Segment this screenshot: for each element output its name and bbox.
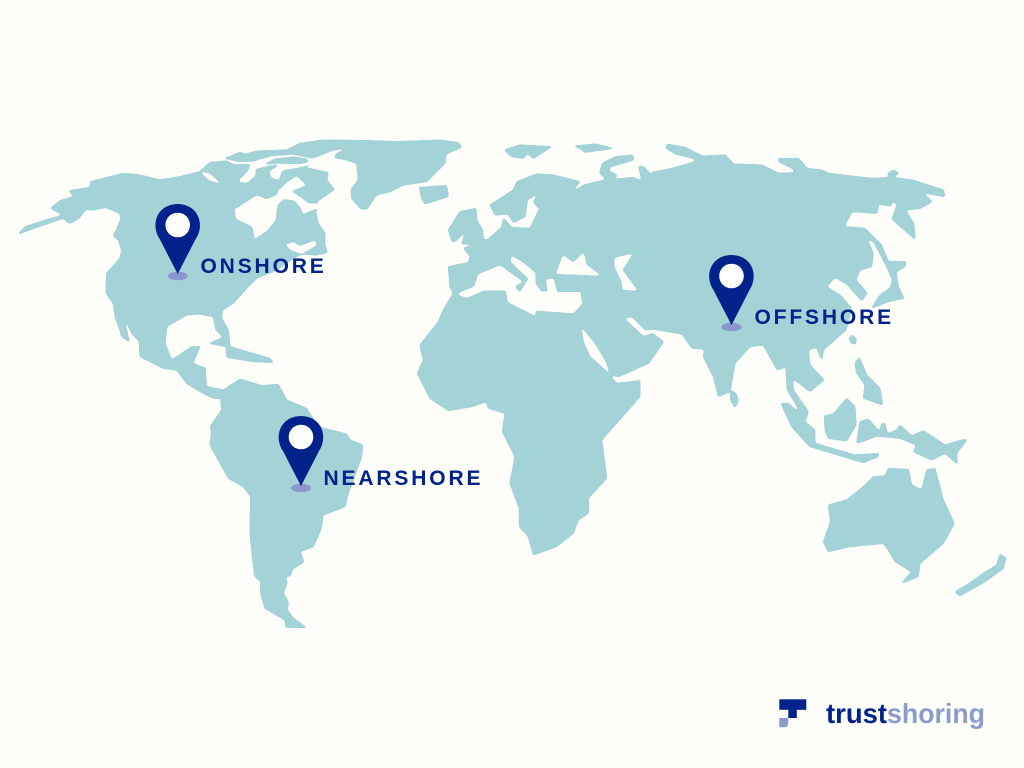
pin: nearshore — [279, 416, 323, 492]
landmass: Greenland and Arctic strip — [225, 140, 462, 209]
landmass: Eurasia and Africa — [417, 144, 945, 555]
world map — [18, 140, 1006, 627]
logo wordmark: trustshoring — [826, 698, 985, 729]
pin: onshore — [155, 204, 200, 280]
seas: Hudson Bay and Arctic channels — [202, 156, 320, 253]
Sri Lanka — [730, 390, 738, 408]
landmass: Americas — [18, 160, 363, 627]
logo: trustshoring — [779, 698, 985, 729]
label: onshore: ONSHORE — [200, 255, 327, 278]
islands: Taiwan — [849, 335, 857, 344]
pin: offshore — [709, 255, 754, 331]
islands: Svalbard and Novaya Zemlya — [504, 144, 613, 158]
landmass: Arctic island and Iceland — [265, 157, 448, 204]
Philippines — [855, 357, 883, 405]
islands and Australia — [730, 357, 1006, 596]
Borneo — [824, 398, 856, 441]
Australia — [823, 468, 954, 583]
seas: Mediterranean, Black Sea and Caspian — [458, 253, 637, 315]
New Zealand — [955, 554, 1006, 596]
New Guinea chain — [857, 419, 967, 464]
label: offshore: OFFSHORE — [754, 306, 894, 329]
logo icon — [779, 699, 806, 727]
label: nearshore: NEARSHORE — [324, 467, 483, 490]
